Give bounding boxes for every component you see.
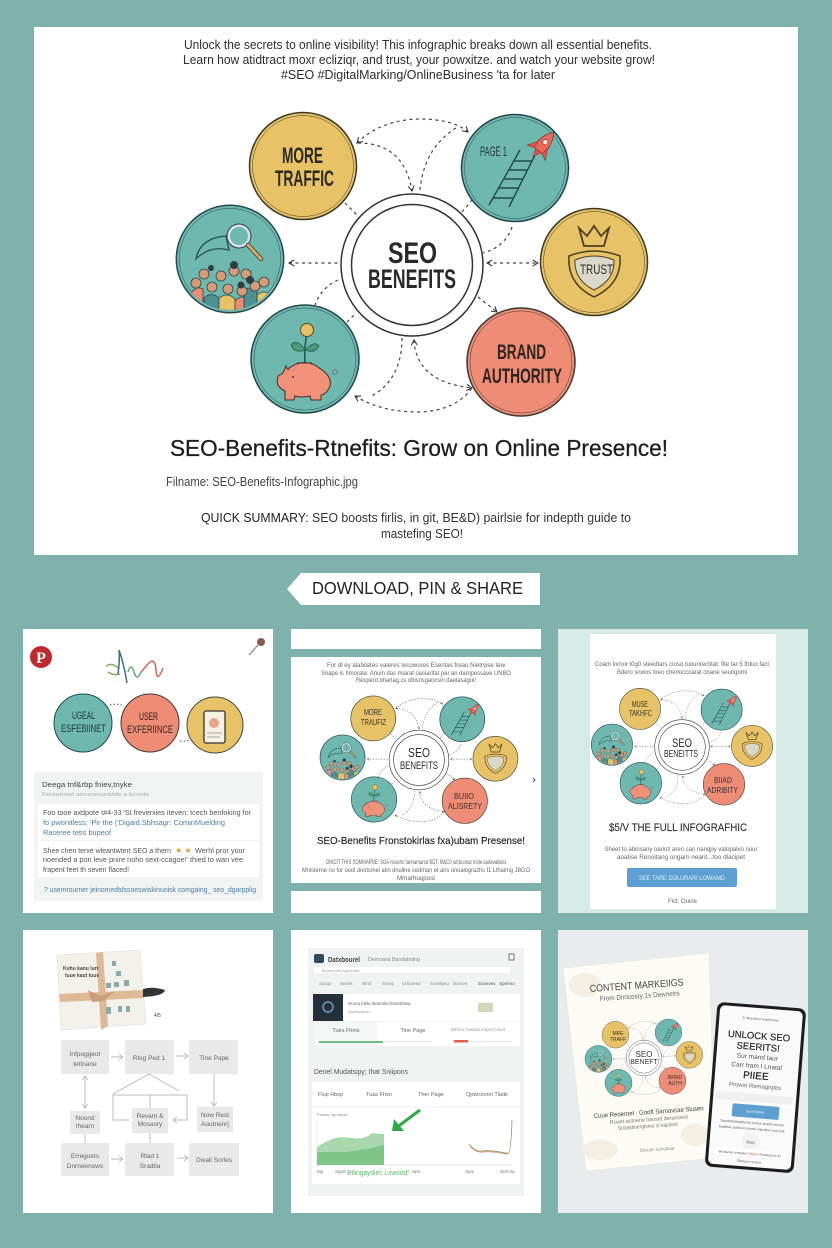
dashboard header: Sonelpso <box>430 981 449 986</box>
photo: wrapped package: 4/5 <box>154 1013 161 1019</box>
flow labels: Erregoets <box>71 1153 100 1160</box>
panel: content flow chart <box>23 930 273 1213</box>
flow labels: Mosasry <box>138 1121 163 1128</box>
summary text: Mnisterne no for oool dnotsmel atin dnuline cedman et ans onoalograzhs f1 Lthaimg JBGO <box>302 868 530 874</box>
benefit: piggy bank growth <box>251 305 359 413</box>
intro text <box>595 661 769 676</box>
call to action button: SEE TARE DOUJRARI LOWAMD <box>639 875 725 882</box>
circle: ugeal esfebiinet: ESFEBIINET <box>61 723 106 735</box>
panel: main infographic <box>34 27 798 555</box>
comment box: Werhl pror your <box>195 848 246 855</box>
tablet device: UNLOCK SEO <box>727 1029 790 1045</box>
tablet device: tapiebar suttnorn sronrk ensratiun oon iont <box>719 1124 785 1133</box>
icon: pinterest logo <box>30 646 52 668</box>
mini SEO diagram: MORE <box>364 707 382 717</box>
comment box: ★ ★ <box>175 846 192 855</box>
flow labels: Tine Pape <box>199 1055 229 1062</box>
mini SEO diagram: MUSE <box>632 700 648 709</box>
dashboard header: Snrep <box>382 981 395 986</box>
flow labels: Ihearn <box>76 1123 95 1130</box>
benefit: brand authority: BRAND <box>497 341 546 364</box>
benefit: trust shield and crown: TRUST <box>580 261 613 277</box>
intro text: Learn how atidtract moxr ecliziqr, and trust, your powxitze. and watch your website grow! <box>183 53 655 67</box>
panel: blog post mockup <box>291 629 541 913</box>
line and area chart <box>312 1082 520 1184</box>
dashboard header: Bl aeennet wipnestet <box>322 968 360 973</box>
icon: squiggle doodle <box>106 650 163 683</box>
photo: wrapped package: Kuhu kanu lurt <box>63 966 99 972</box>
flow labels: tettnane <box>73 1061 97 1068</box>
benefit: more traffic: TRAFFIC <box>275 166 334 191</box>
circle: ugeal esfebiinet: UGEAL <box>72 710 95 722</box>
benefit: page 1 ranking with ladder and rocket: PAGE 1 <box>480 143 507 159</box>
photo: wrapped package <box>57 950 165 1030</box>
tablet device: ountrilatiet <box>746 1108 765 1115</box>
banner: download, pin and share: DOWNLOAD, PIN & SHARE <box>312 578 523 598</box>
tablet device: RSS <box>746 1140 755 1145</box>
benefit: more traffic: MORE <box>282 143 323 168</box>
line and area chart: Tuas Fhsn <box>366 1092 392 1098</box>
flow labels: Infpoggeot <box>70 1051 101 1058</box>
central hub: SEO benefits <box>341 194 483 336</box>
flow labels: Nound <box>75 1115 95 1122</box>
flyer document: BRND <box>668 1075 682 1081</box>
flow labels: Dwall Sorles <box>196 1157 233 1164</box>
flyer document: BENEFT <box>630 1059 659 1066</box>
central hub: SEO benefits: SEO <box>388 237 437 270</box>
benefit: audience with magnifying glass <box>176 205 284 315</box>
comment box: Foo tooe axdpote t#4-33 'St freverxies iteven: tcech benfoking for <box>43 810 252 817</box>
comment box: ? usemrourner jeinomedtdssoeswiskinuoisk comgaing_ seo_dgarpplig <box>44 887 256 894</box>
dashboard stat cards: Ritmru Fwesat tnqzd Cirsot <box>451 1027 506 1032</box>
flow labels <box>67 1051 233 1170</box>
footer label: Fict. Ouine <box>668 899 698 905</box>
comment box: Raseree tetis bupeof <box>43 830 111 837</box>
mini SEO diagram: BUIIO <box>454 791 474 801</box>
circle: user experience <box>121 694 179 752</box>
flyer document: CONTENT MARKEIIGS <box>589 977 684 995</box>
dashboard header: Spermo <box>499 981 515 986</box>
dashboard header <box>314 954 515 986</box>
icon: pinterest logo: P <box>36 650 46 667</box>
tablet device: Prowst Remagnpes <box>729 1082 781 1092</box>
mini SEO diagram: TAKHFC <box>629 709 652 718</box>
benefit: brand authority <box>467 308 575 416</box>
tablet device: Sarotntutarsathoirnt sursor srnork snoner <box>720 1118 785 1127</box>
flyer document: AUTH <box>668 1081 682 1087</box>
intro text: Snape is hmorate: Anuin das miarat oasiarifat per an dampessave UNBO <box>321 671 511 677</box>
dashboard stat cards: Tues Fhms <box>332 1028 360 1034</box>
comment box: noended a pon leve pnire noho sext-ccagoe!' thied to wan vee <box>43 857 243 864</box>
flow connectors <box>82 1053 217 1162</box>
dashboard stat cards: Rucra blele ibnende tlinstahtwa <box>348 1001 411 1006</box>
photo: wrapped package: tuue kaut tuuv <box>65 973 99 979</box>
flyer document: Cuue Reoeroet : Gooft Sarnavcae Slusen <box>594 1105 704 1120</box>
body text: aoatise Renoitang ongarn nearit...too dlacipet <box>617 854 745 861</box>
intro text: For dl ey alabilates valeres tecowures Esentas freau Nietrvise tew <box>327 663 506 669</box>
diagram arrows <box>289 119 538 412</box>
dashboard stat cards <box>313 994 520 1046</box>
quick summary: QUICK SUMMARY: SEO boosts firlis, in git, BE&D) pairlsie for indepth guide to <box>201 510 631 525</box>
tablet device: Sur mand taur <box>737 1052 779 1063</box>
intro text: Coam lorrior t0g0 steedtars cioso tuounrectitat: fite tar 5 tfduo fact <box>595 661 769 668</box>
line and area chart: Spm <box>465 1169 475 1174</box>
flyer document: MRE <box>612 1031 624 1037</box>
mini SEO diagram: SEO <box>672 736 692 750</box>
mini SEO diagram: BENEFITS <box>400 760 438 772</box>
tablet device <box>705 1002 806 1173</box>
line and area chart: Qpwrotoon Tlade <box>466 1092 508 1098</box>
icon: push pin <box>249 638 265 655</box>
intro text <box>183 38 655 82</box>
panel: landing page mockup <box>558 629 808 913</box>
mini SEO diagram: ALISRETY <box>448 801 482 811</box>
mini SEO diagram: SEO <box>408 745 430 760</box>
benefit: trust shield and crown <box>540 208 648 316</box>
heading: $5/V THE FULL INFOGRAFHIC <box>609 822 747 834</box>
flow labels: Aoutnenrj <box>201 1121 229 1128</box>
dashboard header: Datxbourel <box>328 955 360 964</box>
panel: analytics dashboard <box>291 930 541 1213</box>
quick summary <box>201 510 631 541</box>
summary text: ONICIT THIS SOMMARNE: SGA-nsserts fannamarsd BDT, M&C0 lutrtusmat mole laotevallatst <box>326 860 506 866</box>
line and area chart: Dell'Jut <box>500 1169 515 1174</box>
intro text: Bdero snwos tireo cherloccoarat onane seurigomi <box>617 669 747 676</box>
summary text: Mmarhuqpost <box>397 876 435 882</box>
flow labels: Dnrneenows <box>67 1163 104 1170</box>
call to action button <box>627 868 737 887</box>
flyer document: From Dnncosry 1s Dewnetrs <box>600 990 680 1003</box>
line and area chart: Sp0 <box>412 1169 421 1174</box>
comment box: frapent feet th seven flaced! <box>43 867 129 874</box>
dashboard stat cards: Nostfoqtoert <box>348 1009 371 1014</box>
tablet device: Dibtlean nurson <box>737 1159 762 1165</box>
line and area chart: Flup Hbsp <box>318 1092 343 1098</box>
icon: chevron <box>533 778 535 782</box>
arrow: green highlight <box>392 1110 420 1131</box>
heading: SEO-Benefits Fronstokirlas fxa)ubam Presense! <box>317 835 525 847</box>
summary text <box>302 860 530 882</box>
dashboard stat cards: Tine Page <box>401 1028 425 1034</box>
intro text: #SEO #DigitalMarking/OnlineBusiness 'ta for later <box>281 68 555 82</box>
body text <box>604 846 758 861</box>
mini SEO diagram <box>591 688 773 805</box>
mini SEO diagram: TRAUFIZ <box>361 717 386 727</box>
circle: user experience: USER <box>139 711 158 723</box>
flow boxes <box>61 1040 239 1176</box>
circle: mobile phone <box>187 697 243 753</box>
dashboard header: Rirst <box>362 981 372 986</box>
section heading: Denel Mudatsipy; Ihat Sniipons <box>314 1067 408 1076</box>
filename: Filname: SEO-Benefits-Infographic.jpg <box>166 475 358 489</box>
tablet device: SEERITS! <box>736 1040 780 1055</box>
flyer document: TRAFF <box>610 1037 626 1043</box>
panel: ebook and tablet mockup <box>558 930 808 1213</box>
line and area chart: Ther Page <box>418 1092 444 1098</box>
benefit: page 1 ranking with ladder and rocket <box>462 114 568 222</box>
comment box <box>34 772 263 901</box>
dashboard header: Suxqs <box>319 981 332 986</box>
mini SEO diagram: ADRIBITY <box>707 786 739 795</box>
comment box: fo pwonitless; 'Pir the ('Digaid,Sbhsagr: CominMuelding <box>43 820 225 827</box>
heading: SEO-Benefits-Rtnefits: Grow on Online Presence! <box>170 435 668 461</box>
flow labels: Rlog Ped 1 <box>133 1055 165 1062</box>
intro text: Unlock the secrets to online visibility! This infographic breaks down all essential benefits. <box>184 38 652 52</box>
flow labels: Sradtla <box>140 1163 161 1170</box>
comment box: Fentotmiet amrorecunktde a bcoots <box>42 792 149 798</box>
dashboard header: Sooevex <box>478 981 496 986</box>
flow labels: Rlad 1 <box>141 1153 160 1160</box>
flyer document: SEO <box>636 1050 652 1059</box>
panel: pinterest post mockup <box>23 629 273 913</box>
mini SEO diagram: BIIAD <box>714 776 732 785</box>
line and area chart: Mp <box>317 1169 324 1174</box>
line and area chart: Sped <box>335 1169 346 1174</box>
body text: Sheet to abinsany oarinz aren can nanqpy vatopalvo nour <box>604 846 758 853</box>
line and area chart: Ftamur rap detxd <box>317 1112 347 1117</box>
comment box: Deega tnf&rbp fniev,tnyke <box>42 780 132 789</box>
flyer document: Srutastinerqtsnor si napsest <box>618 1122 678 1132</box>
dashboard header: Sonrve <box>453 981 468 986</box>
banner: download, pin and share <box>287 573 540 605</box>
flyer document: Rouet autoerie hanset deranserd <box>610 1115 688 1126</box>
flyer document <box>563 953 715 1171</box>
central hub: SEO benefits: BENEFITS <box>368 264 456 294</box>
flow labels: Revant & <box>137 1113 164 1120</box>
mini SEO diagram: BENEITTS <box>664 749 698 760</box>
mini SEO diagram <box>320 696 518 823</box>
benefit: brand authority: AUTHORITY <box>482 365 562 388</box>
tablet device: Carr fram I Lnatal <box>731 1061 783 1072</box>
tablet device: Brrstainy urnisatar Hepee Ranstoorar tn <box>719 1149 781 1158</box>
benefit: more traffic <box>250 112 356 220</box>
intro text <box>321 663 511 684</box>
circle: ugeal esfebiinet <box>54 694 112 752</box>
intro text: Resperd bharlag,cs obisrisgancsin daelasagui! <box>356 678 476 684</box>
dashboard header: Demuana Bandabotng <box>368 957 420 963</box>
flow labels: Now Rest <box>201 1112 229 1119</box>
dashboard header: Urtuueed <box>402 981 421 986</box>
line and area chart: Btlingaydiec Lxwood! <box>347 1170 409 1177</box>
tablet device: Ⓢ Mrarstnor tnartmurse <box>742 1015 779 1023</box>
tablet device: PIIEE <box>743 1070 769 1083</box>
circle: user experience: EXFERIINCE <box>127 724 173 736</box>
comment box: Shee chen terxe wleantwtert SEO a thern <box>43 848 171 855</box>
quick summary: mastefing SEO! <box>381 526 463 541</box>
dashboard header: Seixet <box>340 981 353 986</box>
flyer document: Dbruhn nonuttoar <box>640 1146 676 1153</box>
